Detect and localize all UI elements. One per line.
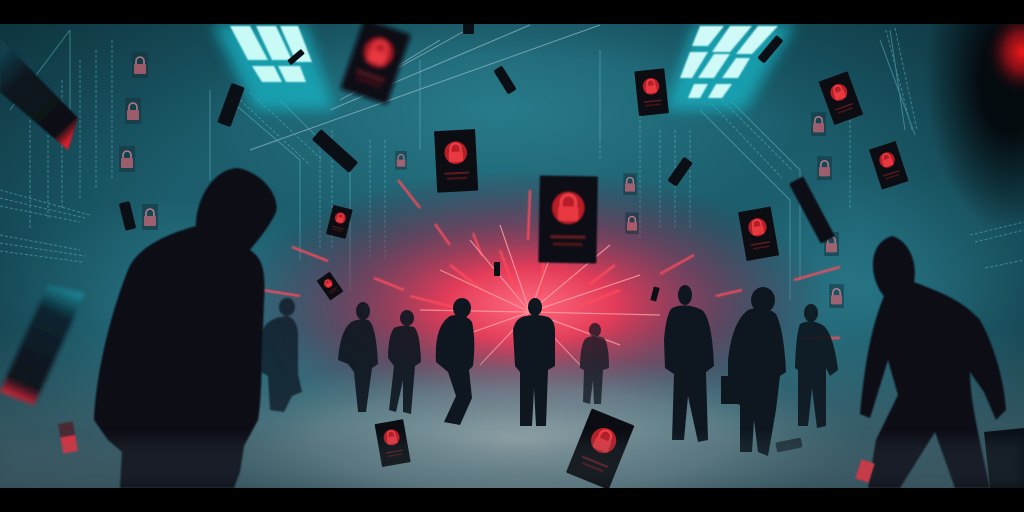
lock card centre right — [738, 207, 779, 261]
lock card upper — [634, 68, 669, 116]
floating dark shards — [119, 24, 835, 453]
small wall locks — [119, 52, 844, 308]
floating lock cards — [317, 19, 909, 490]
lock card centre large — [538, 175, 598, 263]
lock card bottom right — [566, 408, 634, 490]
figure 8 hooded — [721, 287, 786, 456]
big hooded figure left — [94, 168, 277, 488]
letterbox bottom — [0, 488, 1024, 512]
figure 4 hooded — [436, 298, 474, 425]
tube top left — [0, 38, 78, 150]
lock card bottom — [375, 419, 411, 467]
ceiling light left — [212, 24, 335, 110]
small tube bottom left — [58, 421, 78, 454]
crowd of smaller figures — [261, 285, 838, 456]
central red burst — [230, 170, 840, 440]
letterbox top — [0, 0, 1024, 24]
figure 3 — [388, 310, 421, 414]
case right — [984, 428, 1024, 488]
figure 1 — [261, 298, 302, 412]
big hooded figure right — [860, 236, 1006, 488]
fog band — [0, 330, 1024, 488]
circuit walls — [0, 25, 1024, 300]
lock card centre left — [434, 129, 478, 193]
lock card right — [869, 141, 909, 190]
red corner glow — [986, 10, 1024, 94]
lock card tiny — [317, 272, 343, 300]
figure 2 — [338, 302, 378, 412]
figure 7 — [664, 285, 714, 442]
tube left — [0, 285, 85, 405]
lock card upper right — [819, 71, 863, 125]
figure 5 centre — [513, 298, 555, 426]
lower fog veil — [0, 440, 1024, 488]
central fog glow — [180, 355, 860, 512]
lock card top centre — [340, 19, 411, 105]
figure 6 — [580, 323, 609, 404]
lock card small — [326, 205, 353, 239]
figure 9 — [795, 304, 838, 428]
ceiling light right — [665, 24, 795, 110]
red glove — [855, 459, 875, 483]
